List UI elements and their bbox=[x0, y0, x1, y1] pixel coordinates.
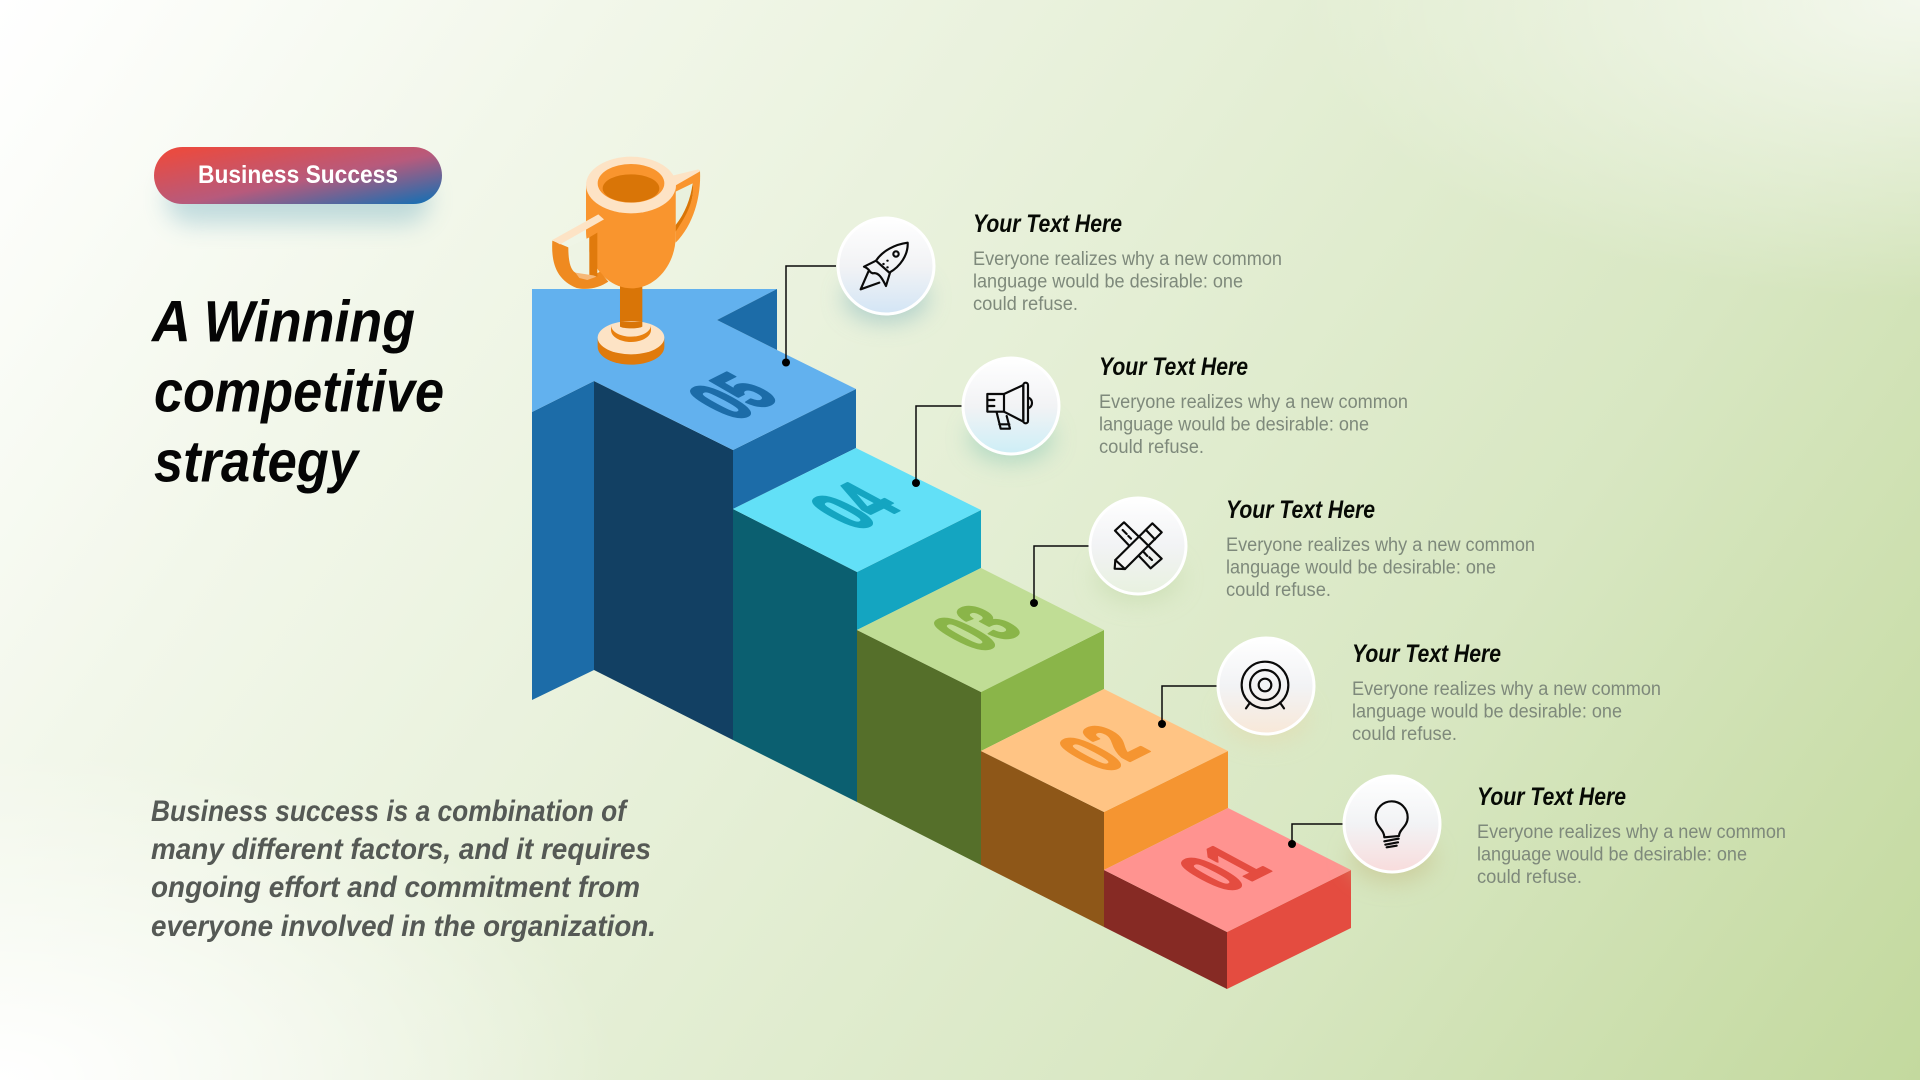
description paragraph: ongoing effort and commitment from bbox=[151, 871, 640, 904]
text block 2: Your Text Here bbox=[1352, 640, 1501, 668]
description paragraph: everyone involved in the organization. bbox=[151, 910, 656, 943]
step 03: 03 bbox=[912, 595, 1042, 662]
connector 1 bbox=[782, 266, 836, 366]
connector 2 bbox=[912, 406, 962, 487]
text block 4: could refuse. bbox=[1099, 437, 1204, 458]
badge: Business Success bbox=[154, 147, 442, 224]
text block 4: Your Text Here bbox=[1099, 353, 1248, 381]
description paragraph bbox=[151, 795, 656, 943]
title: strategy bbox=[154, 430, 360, 494]
title: A Winning bbox=[150, 290, 415, 354]
icon circle: target bbox=[1218, 638, 1314, 742]
connector 4 bbox=[1158, 686, 1217, 728]
text block 3: language would be desirable: one bbox=[1226, 558, 1496, 578]
step 01: 01 bbox=[1159, 835, 1289, 902]
connector 5 bbox=[1288, 824, 1343, 848]
icon: trophy bbox=[552, 157, 700, 365]
text block 1: language would be desirable: one bbox=[1477, 844, 1747, 866]
step 04: 04 bbox=[790, 472, 920, 540]
text block 1: Everyone realizes why a new common bbox=[1477, 822, 1786, 843]
step 05 bbox=[532, 289, 856, 740]
text block 5: could refuse. bbox=[973, 294, 1078, 315]
step 05: 05 bbox=[668, 363, 798, 430]
text block 2: could refuse. bbox=[1352, 724, 1457, 745]
text block 1: could refuse. bbox=[1477, 867, 1582, 888]
text block 2: language would be desirable: one bbox=[1352, 702, 1622, 722]
text block 2: Everyone realizes why a new common bbox=[1352, 679, 1661, 700]
text block 5: Your Text Here bbox=[973, 210, 1122, 238]
text block 5 bbox=[973, 210, 1282, 315]
title: competitive bbox=[154, 360, 444, 424]
connector 3 bbox=[1030, 546, 1090, 607]
text block 1: Your Text Here bbox=[1477, 783, 1626, 811]
text block 1 bbox=[1477, 783, 1786, 888]
text block 4: Everyone realizes why a new common bbox=[1099, 392, 1408, 413]
text block 2 bbox=[1352, 640, 1661, 745]
description paragraph: many different factors, and it requires bbox=[151, 833, 651, 866]
text block 4: language would be desirable: one bbox=[1099, 414, 1369, 436]
step 04 bbox=[733, 448, 981, 802]
text block 3: Everyone realizes why a new common bbox=[1226, 535, 1535, 556]
text block 5: Everyone realizes why a new common bbox=[973, 249, 1282, 270]
title bbox=[150, 290, 444, 494]
text block 5: language would be desirable: one bbox=[973, 272, 1243, 292]
step 02: 02 bbox=[1038, 715, 1168, 782]
text block 3 bbox=[1226, 496, 1535, 601]
icon circle: pencil and ruler bbox=[1090, 498, 1186, 602]
icon circle: megaphone bbox=[963, 358, 1059, 462]
icon circle: rocket bbox=[838, 218, 934, 322]
text block 3: could refuse. bbox=[1226, 580, 1331, 601]
step 01 bbox=[1104, 808, 1351, 989]
text block 3: Your Text Here bbox=[1226, 496, 1375, 524]
step 02 bbox=[981, 689, 1228, 927]
text block 4 bbox=[1099, 353, 1408, 458]
isometric staircase bbox=[532, 289, 1351, 989]
icon circle: light bulb bbox=[1344, 776, 1440, 882]
step 03 bbox=[857, 568, 1104, 865]
badge: Business Success: Business Success bbox=[198, 161, 398, 189]
description paragraph: Business success is a combination of bbox=[151, 795, 629, 828]
